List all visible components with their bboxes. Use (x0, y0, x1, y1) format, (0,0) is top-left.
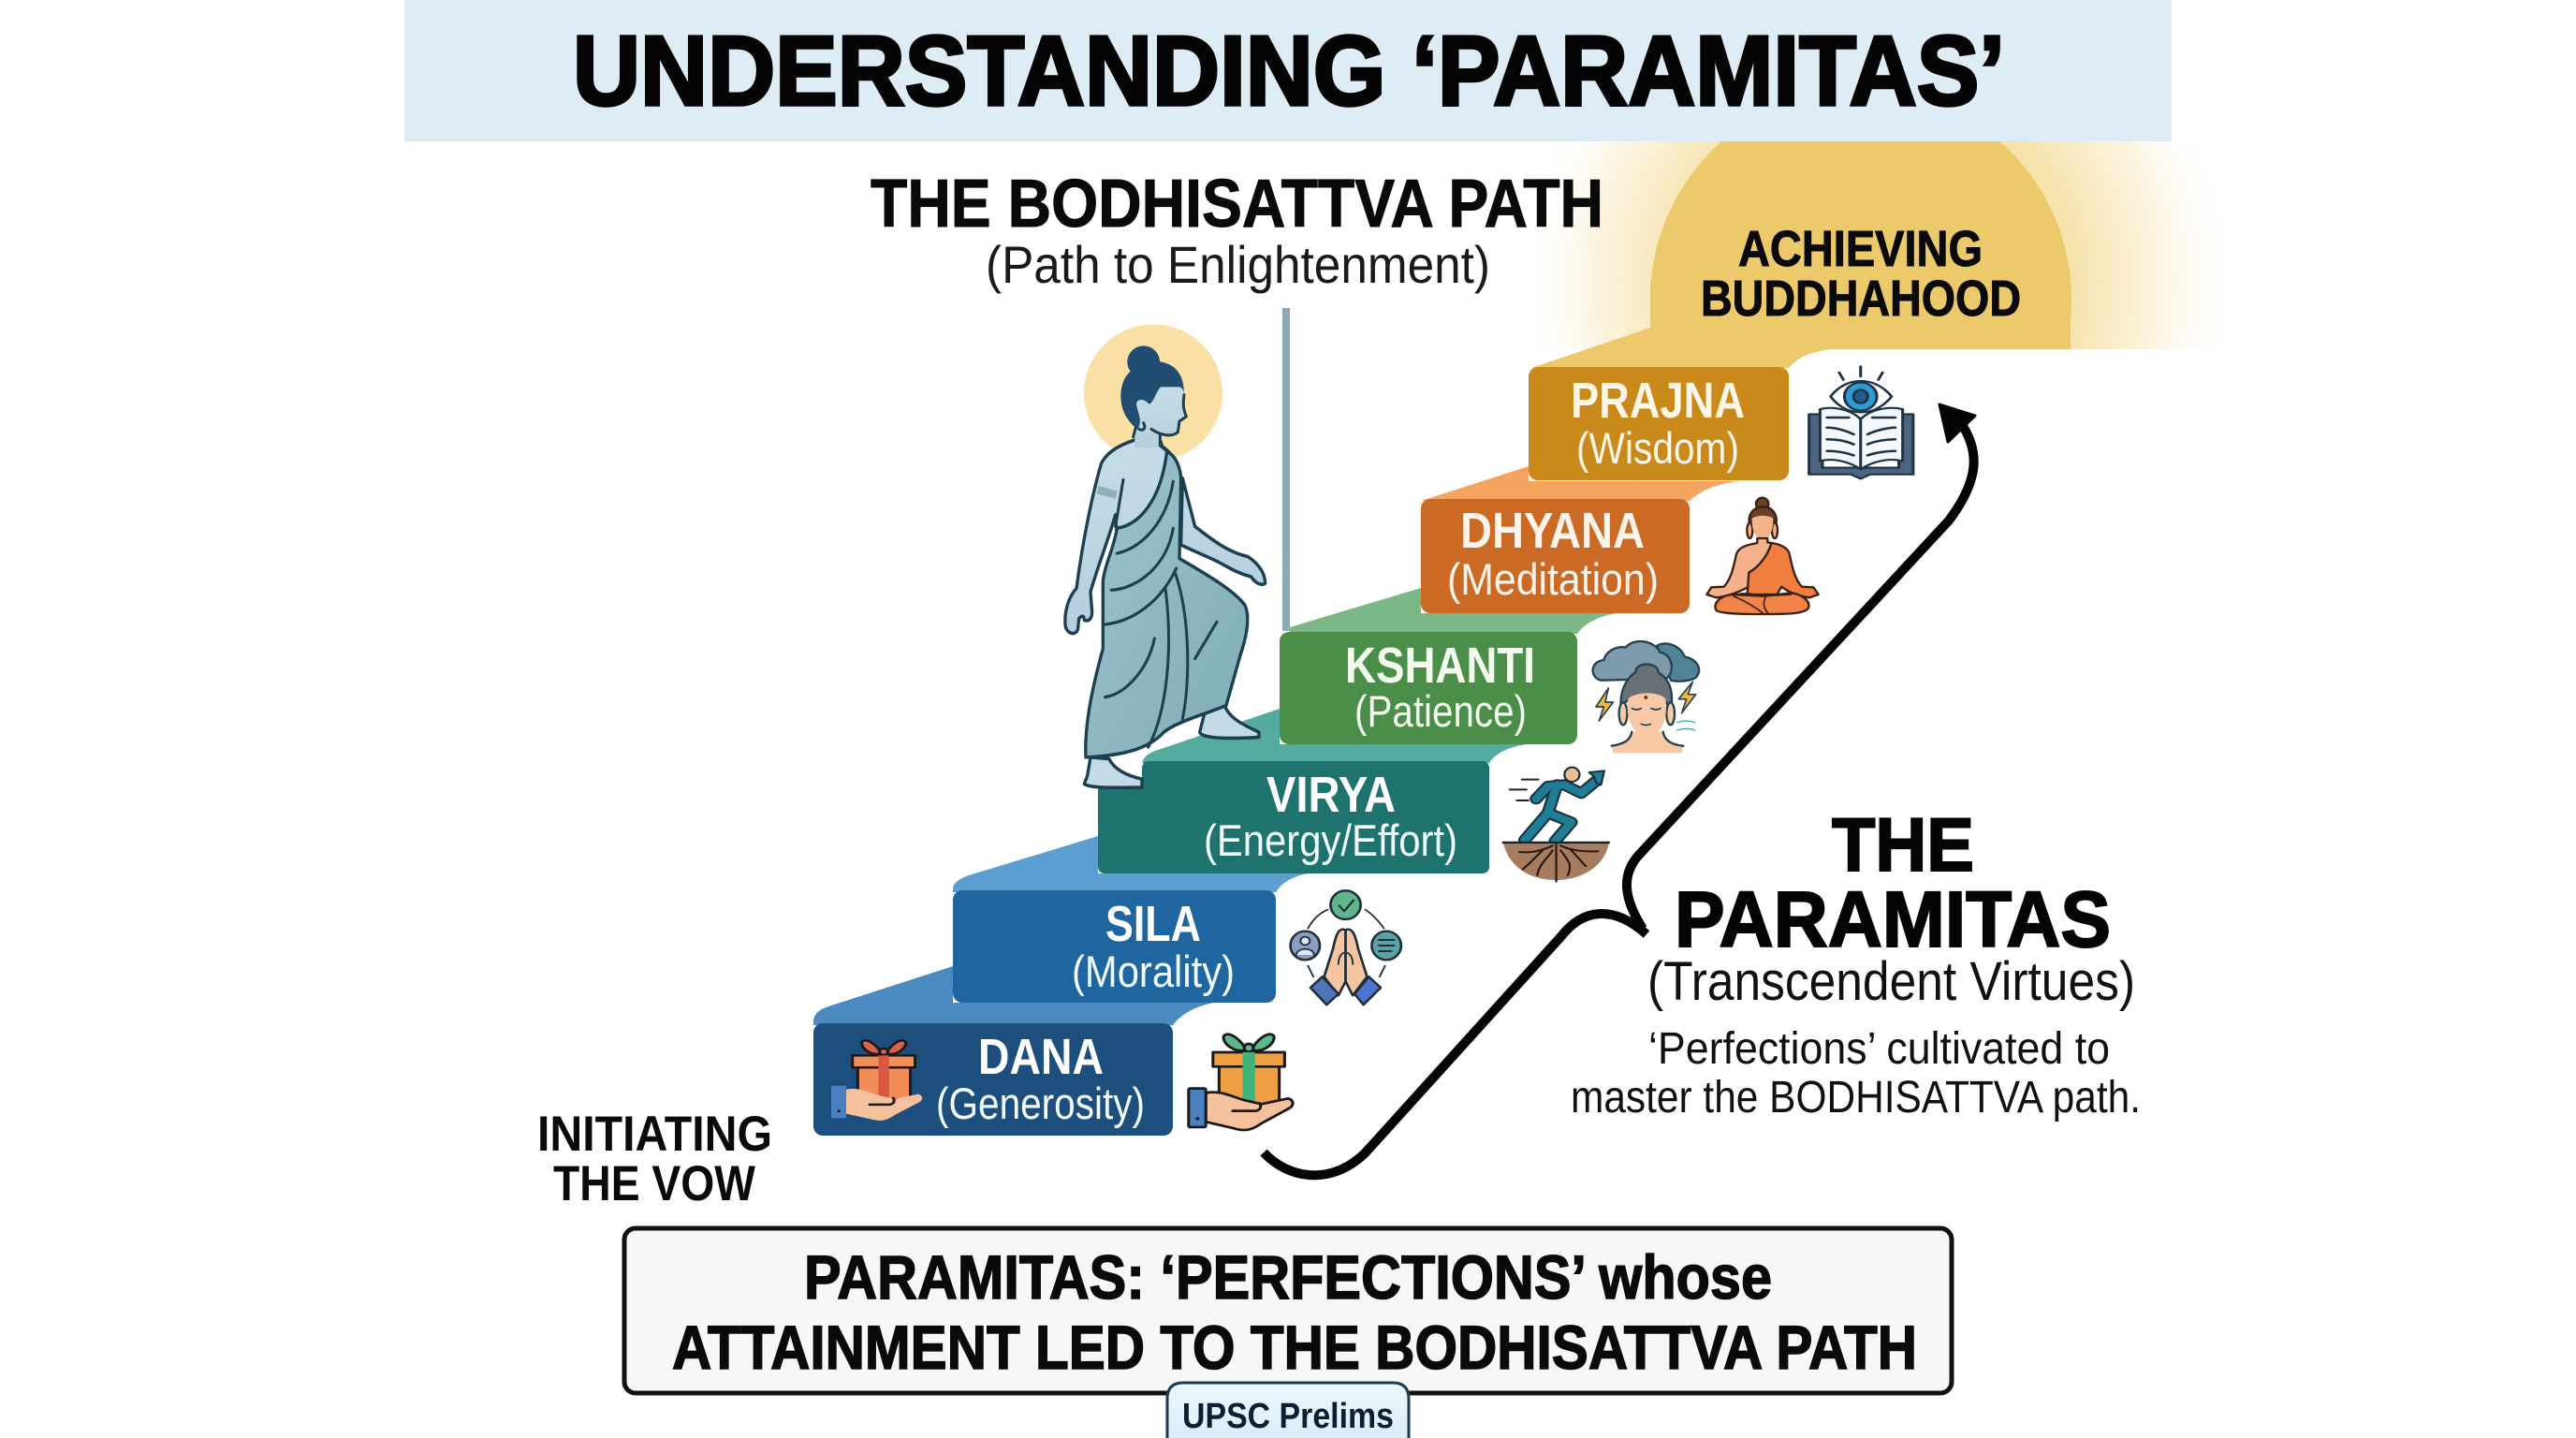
text block: the Paramitas: (Transcendent Virtues) (1647, 951, 2135, 1012)
hair (1120, 361, 1184, 429)
step: Kshanti front (1280, 632, 1577, 744)
book cover (1809, 414, 1913, 478)
orange robe (1748, 543, 1819, 597)
label: Kshanti: (Patience) (1354, 686, 1527, 736)
text block: the Paramitas: PARAMITAS (1675, 875, 2111, 963)
front arm (1181, 478, 1266, 584)
step: Dana front (813, 1023, 1173, 1136)
hair (1749, 506, 1777, 527)
header band (404, 0, 2172, 141)
label: initiating the vow: INITIATING (537, 1107, 772, 1162)
label: Virya: VIRYA (1266, 767, 1396, 823)
icon: meditating figure (Dhyana) (1706, 498, 1819, 614)
arrow: rising path to Buddhahood (1264, 404, 1975, 1175)
upper arrow segment (1627, 423, 1974, 929)
staircase (813, 281, 2071, 1136)
figure body (1065, 324, 1266, 787)
list circle (1371, 932, 1401, 960)
step: Dhyana front (1421, 499, 1690, 613)
label: Virya (1204, 767, 1457, 865)
back arm and torso (1065, 440, 1181, 634)
rays (1839, 366, 1882, 380)
figure: Bodhisattva climbing stairs (1065, 324, 1266, 787)
face and neck (1134, 387, 1186, 448)
hand (846, 1089, 922, 1121)
neck and shoulders (1612, 732, 1683, 753)
ribbon (878, 1055, 889, 1097)
hair (1621, 665, 1672, 710)
icon: praying hands and virtues (Sila) (1291, 890, 1401, 1005)
figure head (1120, 345, 1186, 452)
sun: achieving Buddhahood (1651, 141, 2071, 318)
hand (1206, 1093, 1293, 1130)
label: Dhyana: (Meditation) (1447, 554, 1659, 604)
label: Dana (936, 1029, 1145, 1128)
cuffs (1310, 976, 1339, 1005)
icon: eye on open book (Prajna) (1809, 366, 1913, 478)
step: Dana top face (813, 966, 1213, 1025)
label: Sila: (Morality) (1072, 946, 1235, 996)
speed lines (1510, 780, 1538, 800)
robe (1086, 451, 1248, 757)
crossed legs (1715, 593, 1808, 614)
label: achieving Buddhahood: ACHIEVING (1738, 221, 1983, 277)
bow (862, 1040, 882, 1054)
cuff (831, 1086, 846, 1118)
label: Kshanti: KSHANTI (1345, 638, 1535, 694)
rising arrow (1589, 770, 1604, 785)
badge: UPSC Prelims: UPSC Prelims (1182, 1397, 1394, 1436)
text block: the Paramitas: ‘Perfections’ cultivated to (1648, 1024, 2110, 1074)
face (1752, 516, 1773, 540)
hair bun (1127, 345, 1160, 378)
summary callout box: PARAMITAS: ‘PERFECTIONS’ whose (804, 1242, 1772, 1312)
soil mound (1503, 843, 1609, 880)
summary callout box: ATTAINMENT LED TO THE BODHISATTVA PATH (672, 1313, 1917, 1382)
roots (1519, 843, 1598, 882)
runner outline (1525, 781, 1596, 841)
icon: gift in hand (Dana, outside) (1189, 1034, 1293, 1130)
runner fill (1525, 781, 1596, 841)
title: UNDERSTANDING ‘PARAMITAS’ (573, 16, 2005, 126)
hair bun (1756, 498, 1768, 510)
text lines (1827, 418, 1895, 455)
text block: the Paramitas (1571, 803, 2141, 1123)
lower arrow segment (1264, 914, 1647, 1175)
person circle (1291, 932, 1320, 960)
label: Sila: SILA (1105, 896, 1201, 952)
label: Sila (1072, 896, 1235, 996)
ears (1619, 702, 1627, 725)
head (1564, 768, 1579, 782)
step: Prajna front (1529, 367, 1789, 480)
golden glow behind Buddhahood sun (1535, 141, 2284, 349)
step: Virya front (1098, 761, 1489, 873)
eye (1831, 381, 1892, 412)
box (1219, 1065, 1280, 1105)
label: Dhyana (1447, 503, 1659, 604)
face (1628, 693, 1666, 739)
label: Kshanti (1345, 638, 1535, 736)
icon: gift in hand (Dana, on the step) (831, 1040, 922, 1121)
back foot (1084, 757, 1142, 787)
heading: the Bodhisattva path: THE BODHISATTVA PATH (871, 167, 1603, 242)
step: Sila front (953, 890, 1276, 1003)
label: Prajna (1571, 373, 1745, 473)
front cloud (1593, 641, 1672, 681)
bow (1223, 1034, 1246, 1050)
step: Prajna top face (1531, 281, 2071, 368)
icon: runner on roots (Virya) (1503, 768, 1609, 882)
text block: the Paramitas: master the BODHISATTVA path. (1571, 1073, 2141, 1123)
robe folds (1104, 479, 1217, 747)
label: Prajna: PRAJNA (1571, 373, 1745, 429)
front foot (1200, 706, 1259, 738)
ribbon (1243, 1052, 1255, 1102)
label: Dana: DANA (978, 1029, 1104, 1085)
step: Dhyana top face (1421, 466, 1739, 501)
step: Virya top face (1142, 709, 1526, 763)
vertical line (1282, 308, 1290, 631)
eyes, bindi and mouth (1632, 709, 1661, 725)
armband (1098, 490, 1117, 495)
step: Kshanti top face (1290, 588, 1617, 634)
badge: UPSC Prelims (1167, 1383, 1409, 1438)
label: Virya: (Energy/Effort) (1204, 815, 1457, 865)
praying hands (1325, 930, 1346, 995)
heading: the Bodhisattva path: (Path to Enlightenment) (986, 235, 1490, 294)
text block: the Paramitas: THE (1832, 803, 1974, 888)
step: Sila top face (953, 836, 1308, 892)
heading: the Bodhisattva path (871, 167, 1603, 294)
label: achieving Buddhahood (1701, 221, 2021, 327)
cuff (1189, 1089, 1206, 1127)
icon: storm cloud and calm face (Kshanti) (1593, 641, 1699, 753)
halo (1084, 324, 1222, 462)
book pages (1820, 408, 1903, 469)
dashed orbit (1308, 910, 1385, 976)
label: initiating the vow: THE VOW (553, 1156, 755, 1211)
label: achieving Buddhahood: BUDDHAHOOD (1701, 271, 2021, 327)
torso and arm (1706, 538, 1772, 597)
arrowhead (1939, 404, 1975, 442)
rear cloud (1657, 643, 1699, 682)
label: Prajna: (Wisdom) (1576, 423, 1739, 473)
label: Dana: (Generosity) (936, 1078, 1145, 1128)
box (857, 1066, 911, 1099)
lightning bolts (1596, 688, 1613, 721)
check circle (1330, 890, 1361, 919)
water ripples (1677, 721, 1695, 730)
face outline (1134, 395, 1186, 452)
ears (1747, 522, 1752, 538)
label: Dhyana: DHYANA (1460, 503, 1645, 559)
label: initiating the vow (537, 1107, 772, 1211)
summary callout box (624, 1228, 1952, 1393)
